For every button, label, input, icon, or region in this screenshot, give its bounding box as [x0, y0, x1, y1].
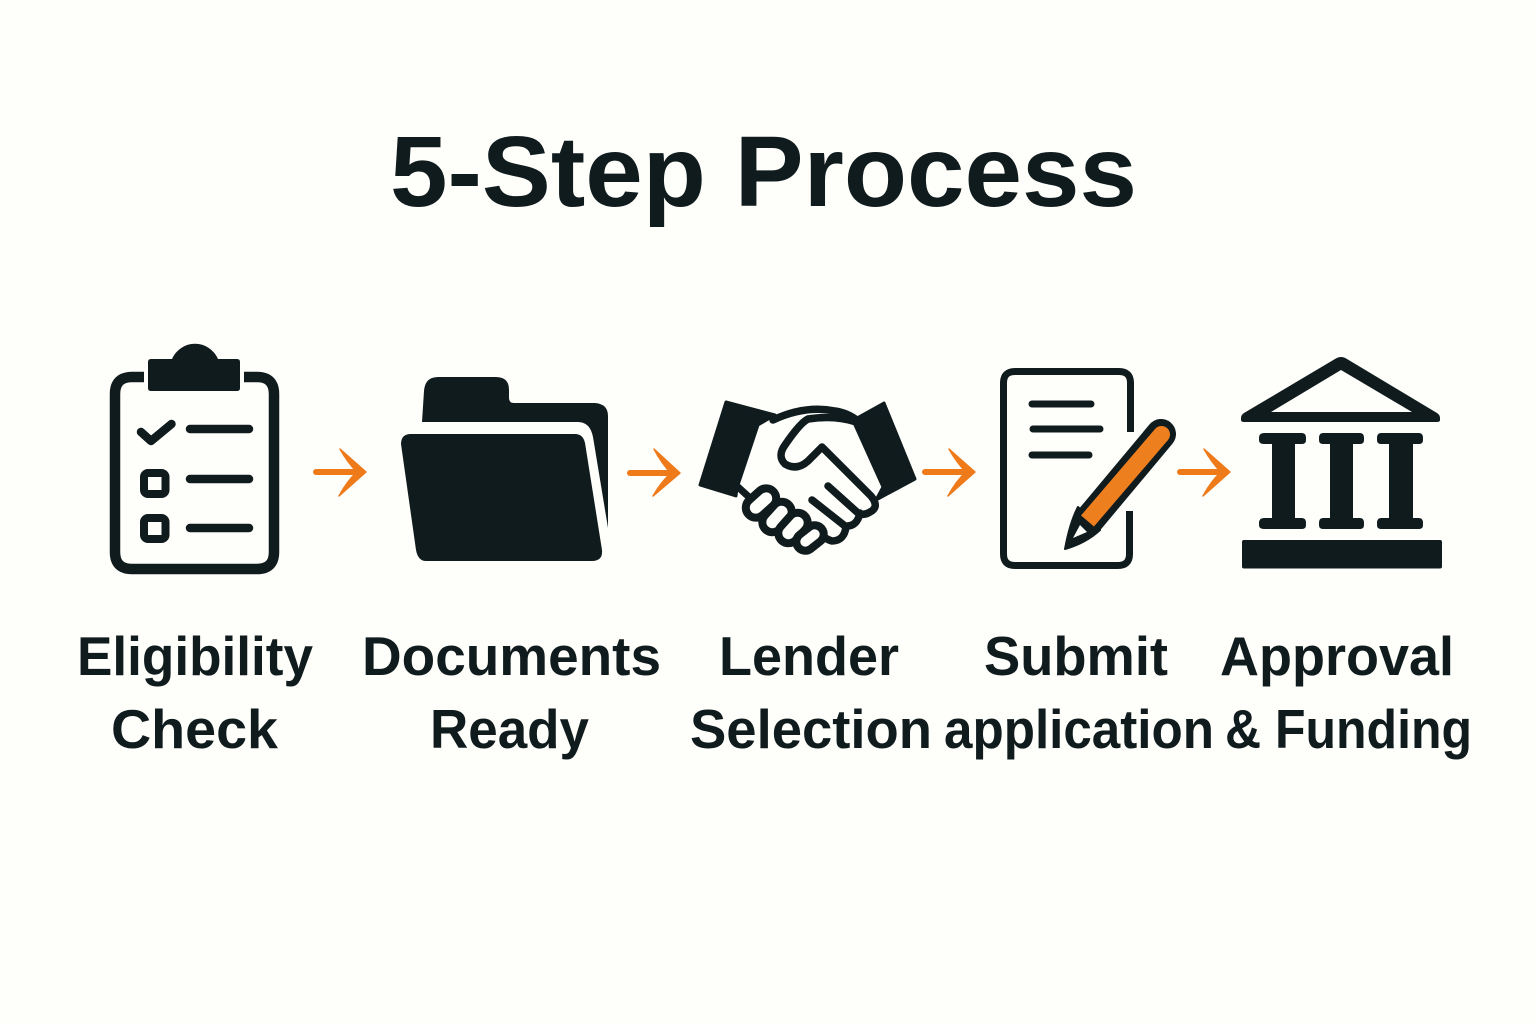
icon: handshake: [700, 402, 915, 554]
label: Submit application: [944, 625, 1214, 760]
label: Approval & Funding: & Funding: [1225, 698, 1472, 760]
label: Approval & Funding: Approval: [1220, 625, 1454, 687]
label: Submit application: Submit: [984, 625, 1168, 687]
label: Lender Selection: [690, 625, 932, 760]
arrow: step 2 to step 3: [630, 449, 680, 496]
label: Approval & Funding: [1220, 625, 1472, 760]
icon: folder: [401, 377, 608, 561]
arrow: step 4 to step 5: [1180, 449, 1230, 496]
label: Documents Ready: Ready: [430, 698, 589, 760]
icon: clipboard checklist: [115, 344, 274, 569]
label: Documents Ready: Documents: [362, 625, 661, 687]
label: Lender Selection: Selection: [690, 698, 932, 760]
arrow: step 1 to step 2: [316, 449, 366, 496]
label: Lender Selection: Lender: [719, 625, 899, 687]
icon: document with pencil: [1004, 372, 1170, 566]
label: Eligibility Check: [77, 625, 313, 760]
label: Documents Ready: [362, 625, 661, 760]
label: Submit application: application: [944, 698, 1214, 760]
title: 5-Step Process: [390, 116, 1137, 228]
icon: bank building: [1241, 357, 1442, 568]
label: Eligibility Check: Check: [111, 698, 278, 760]
label: Eligibility Check: Eligibility: [77, 625, 313, 687]
arrow: step 3 to step 4: [925, 449, 975, 496]
